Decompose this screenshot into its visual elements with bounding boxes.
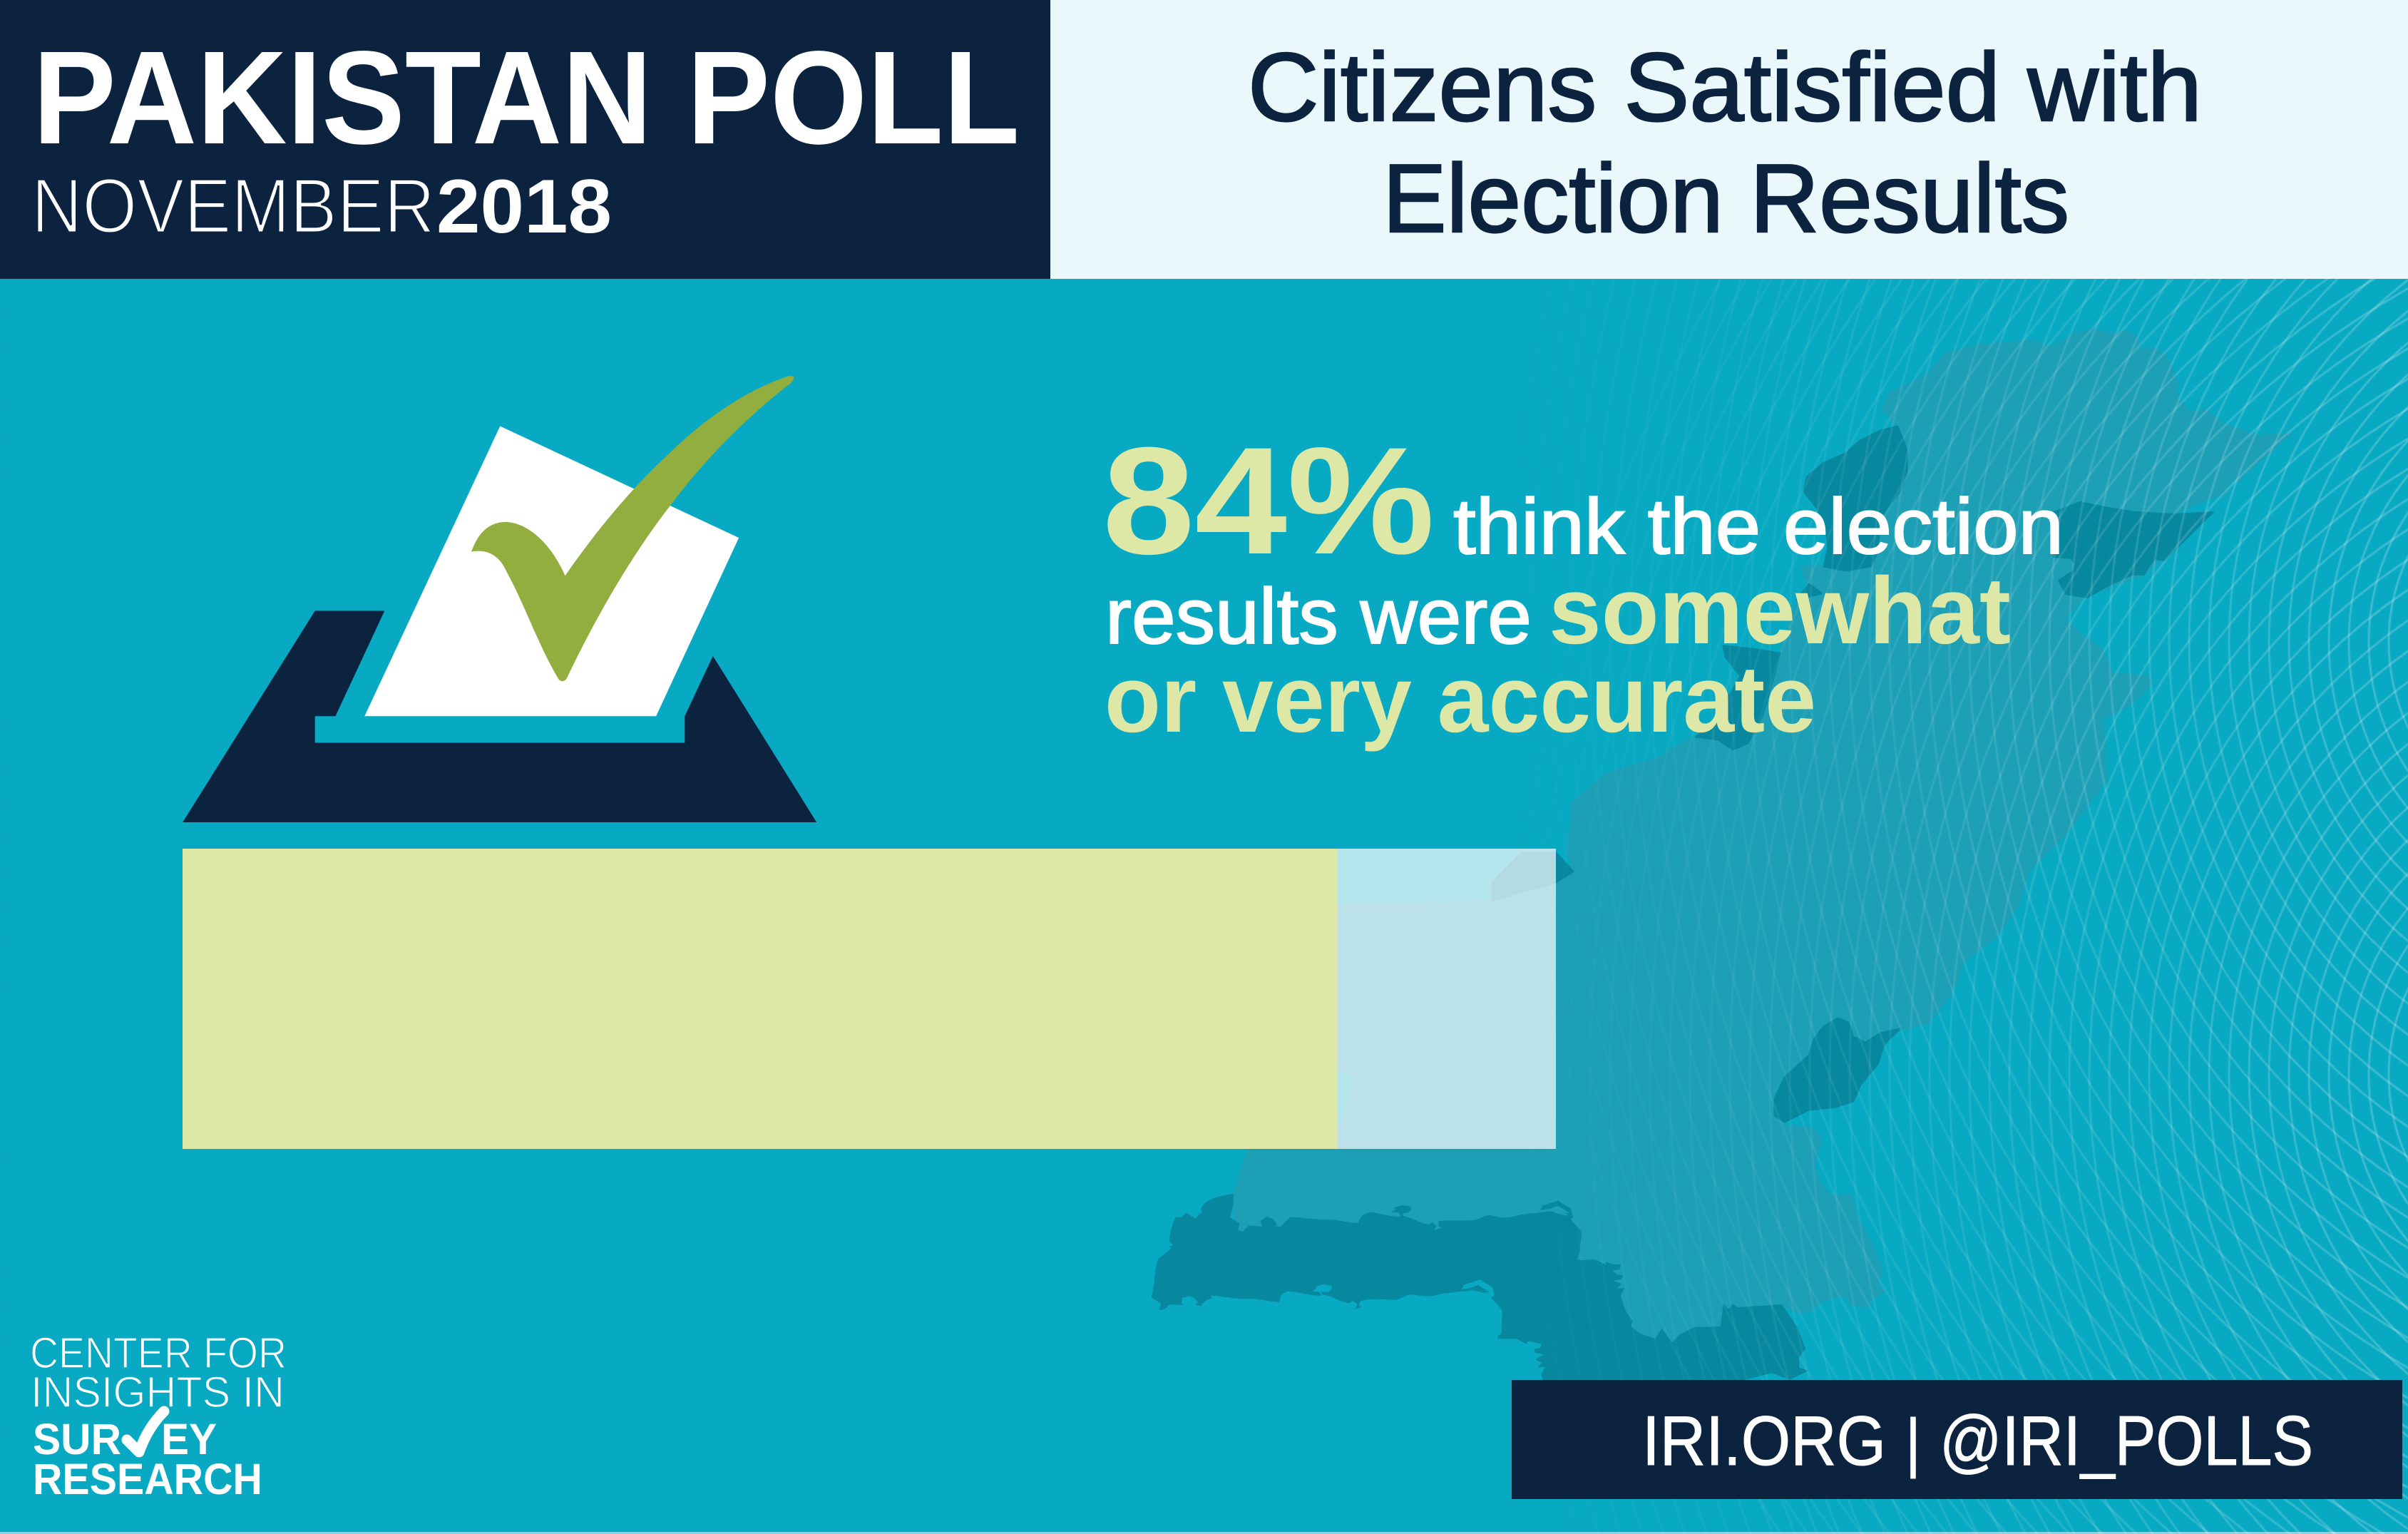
logo: Center for Insights in Survey Research: CENTER FOR	[30, 1329, 287, 1377]
icon: ballot box with check mark	[183, 376, 816, 822]
highlight: somewhat: somewhat	[1549, 558, 2011, 664]
subheading: November 2018: NOVEMBER	[31, 163, 435, 250]
logo: Center for Insights in Survey Research: INSIGHTS IN	[31, 1368, 285, 1416]
footer: web and social links	[1512, 1380, 2402, 1499]
green check mark	[471, 376, 794, 681]
highlight: or very accurate: or very accurate	[1105, 647, 1816, 752]
title line 2: Election Results	[1383, 144, 2069, 252]
ballot box body	[183, 610, 816, 822]
map of Pakistan	[1151, 329, 2290, 1380]
header panel: title	[1050, 0, 2408, 279]
callout: 84 percent statement	[1102, 416, 2064, 752]
big number: 84%	[1102, 416, 1435, 586]
line 1: think the election	[1453, 483, 2064, 571]
title line 1: Citizens Satisfied with	[1248, 33, 2202, 141]
heading: Pakistan Poll: PAKISTAN POLL	[33, 24, 1020, 172]
bar chart: 84 percent share	[183, 849, 1556, 1149]
footer: web and social links: @IRI_POLLS	[1940, 1401, 2313, 1480]
icon: logo check mark	[127, 1411, 164, 1452]
logo: Center for Insights in Survey Research: SUR	[33, 1415, 121, 1463]
logo: Center for Insights in Survey Research: EY	[161, 1415, 217, 1463]
line 2: results were	[1105, 573, 1532, 660]
header panel: poll name	[0, 0, 1050, 279]
logo: Center for Insights in Survey Research: RESEARCH	[33, 1455, 262, 1503]
ballot paper	[364, 426, 739, 716]
footer: web and social links: |	[1905, 1405, 1922, 1479]
footer: web and social links: IRI.ORG	[1642, 1401, 1886, 1480]
logo: Center for Insights in Survey Research	[30, 1329, 287, 1503]
subheading: November 2018: 2018	[436, 163, 612, 249]
